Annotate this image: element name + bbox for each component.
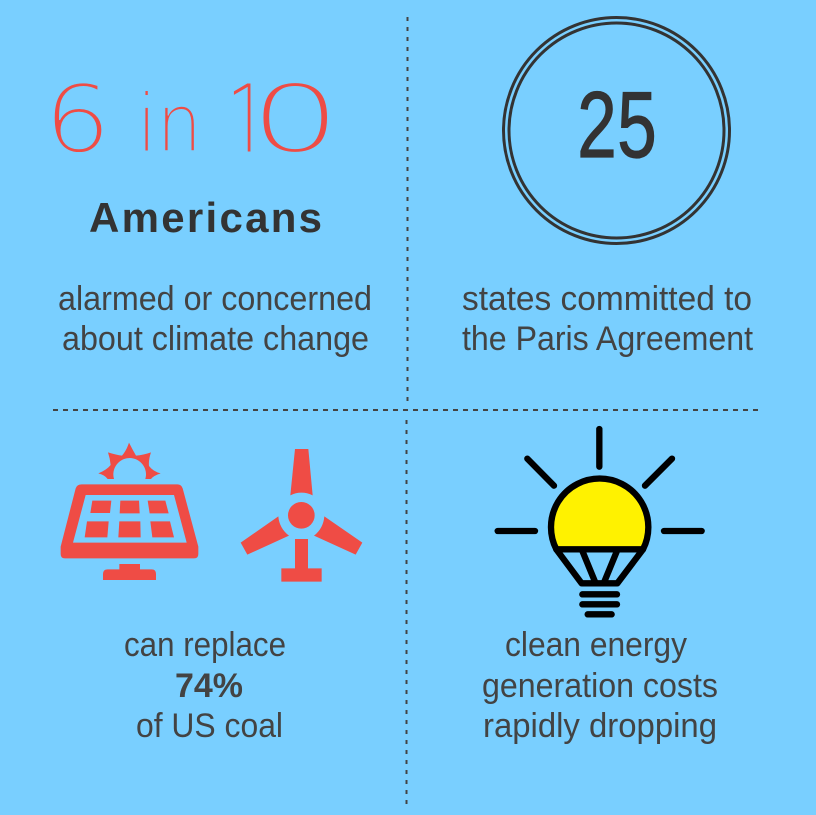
heading: 6 in 10: 6 (44, 66, 111, 173)
text: clean energy generation costs rapidly dropping: rapidly dropping (483, 707, 717, 745)
panel: clean energy costs (482, 429, 718, 745)
text: can replace 74% of US coal: of US coal (136, 707, 283, 745)
panel: 25 states (462, 18, 754, 358)
panel: renewables replace coal (61, 443, 362, 745)
number: 25: 25 (577, 72, 657, 177)
text: clean energy generation costs rapidly dropping: clean energy (505, 626, 687, 664)
heading: 6 in 10: 1 (226, 63, 270, 180)
text: clean energy generation costs rapidly dropping: generation costs (482, 667, 718, 705)
text: clean energy generation costs rapidly dropping (482, 626, 718, 745)
text: alarmed or concerned about climate change (58, 280, 372, 358)
text: can replace 74% of US coal: 74% (175, 667, 243, 705)
text: states committed to the Paris Agreement: the Paris Agreement (462, 320, 754, 358)
heading: 6 in 10: in (137, 78, 202, 170)
text: alarmed or concerned about climate change: about climate change (62, 320, 369, 358)
text: can replace 74% of US coal: can replace (124, 626, 286, 664)
text: can replace 74% of US coal (124, 626, 286, 745)
icon: wind turbine (241, 449, 362, 582)
panel: 6 in 10 Americans (54, 83, 370, 357)
icon: double ring (504, 18, 730, 244)
text: states committed to the Paris Agreement (462, 280, 754, 358)
text: states committed to the Paris Agreement: states committed to (462, 280, 752, 318)
icon: solar panel (61, 443, 198, 580)
heading: 6 in 10 (54, 83, 327, 152)
heading: Americans: Americans (89, 194, 322, 241)
icon: light bulb (498, 429, 702, 614)
text: alarmed or concerned about climate change: alarmed or concerned (58, 280, 372, 318)
heading: 6 in 10: 0 (250, 66, 341, 173)
